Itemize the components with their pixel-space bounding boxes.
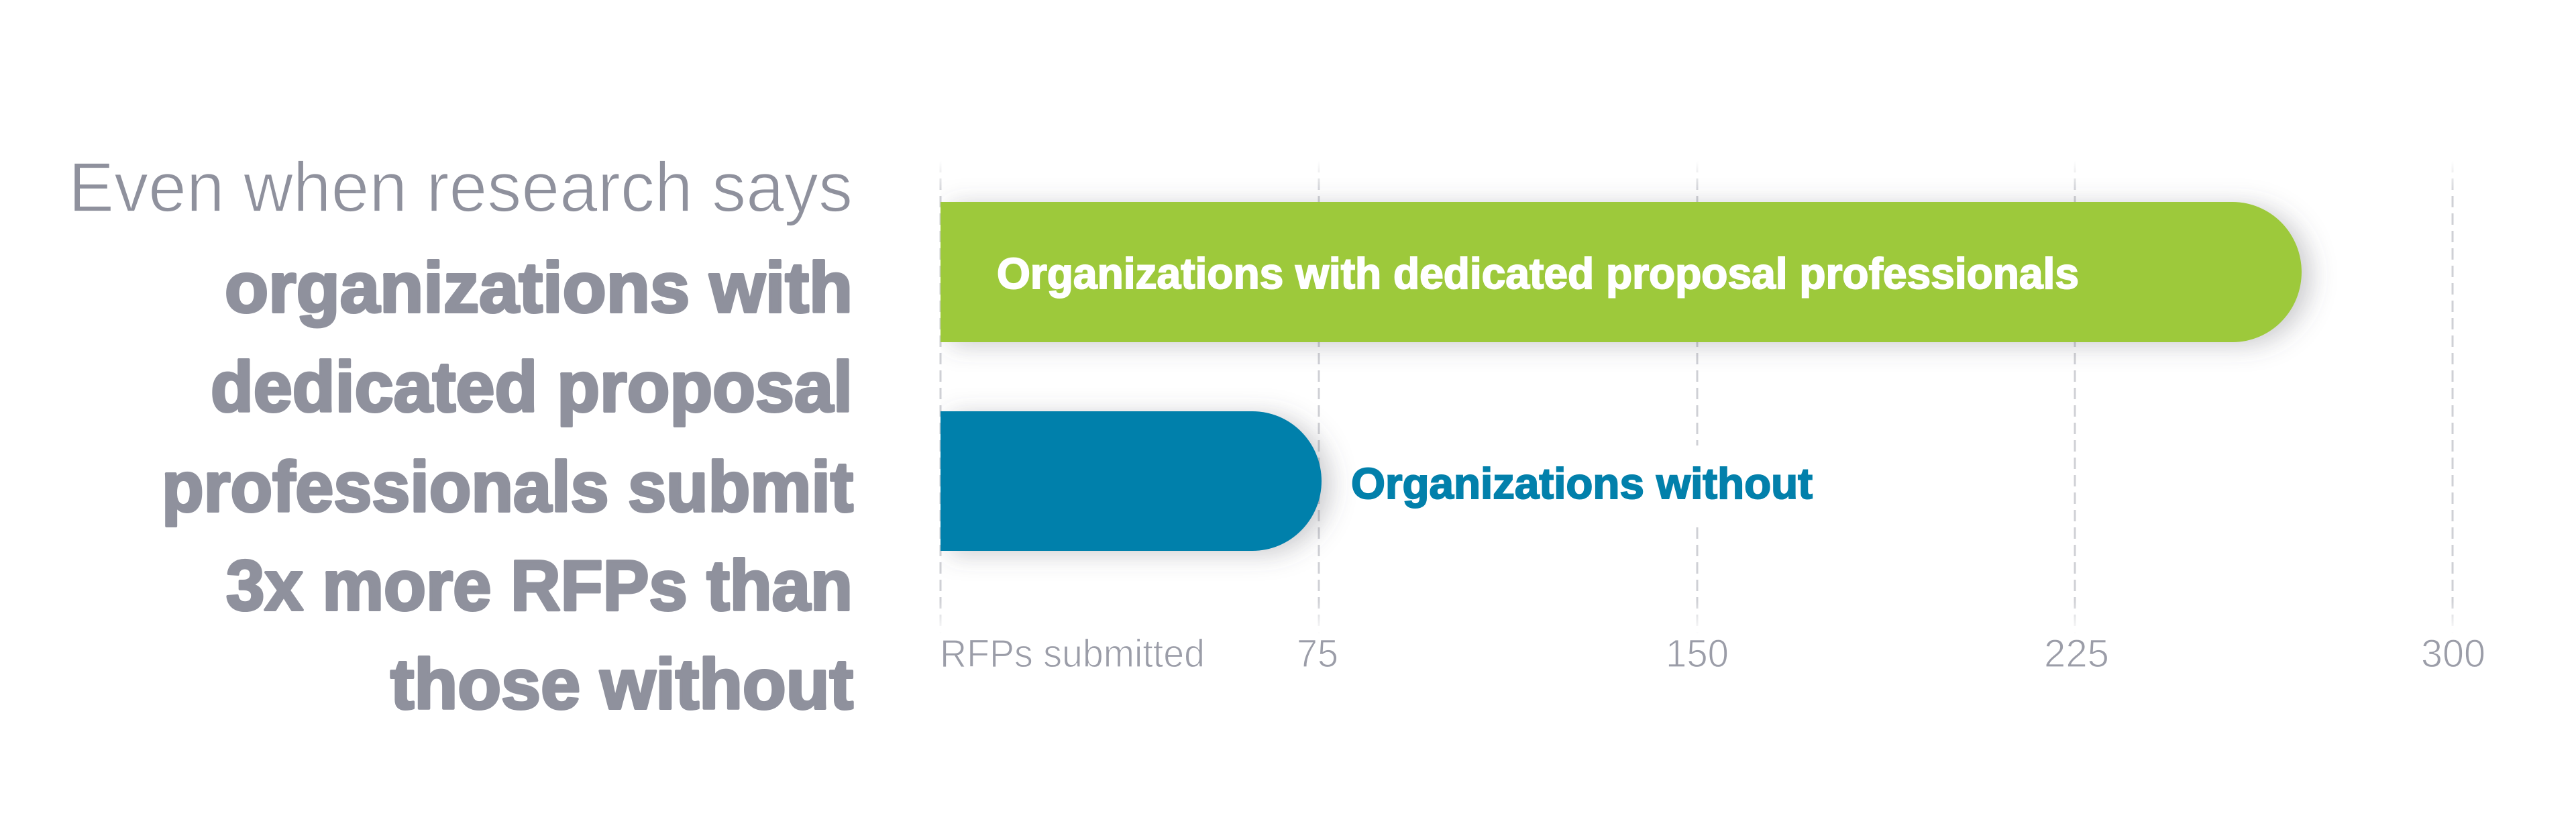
infographic canvas xyxy=(74,161,2483,711)
bar: organizations without xyxy=(941,411,1322,551)
dashed grid lines xyxy=(932,161,2462,634)
bar: organizations with dedicated proposal professionals xyxy=(941,202,2302,342)
headline bold lines: professionals submit xyxy=(162,448,853,527)
axis labels: 150 xyxy=(1666,632,1729,676)
headline text block xyxy=(68,148,853,724)
bar label: without xyxy=(1351,446,1813,524)
bar label: with dedicated professionals: Organizations with dedicated proposal professionals xyxy=(997,249,2079,298)
bar chart xyxy=(932,161,2485,676)
headline intro line: Even when research says xyxy=(68,148,853,227)
bar label: without: Organizations without xyxy=(1351,459,1813,508)
axis labels xyxy=(940,632,2485,676)
headline bold lines xyxy=(162,248,853,724)
axis labels: 75 xyxy=(1297,632,1338,676)
headline bold lines: those without xyxy=(390,645,853,724)
headline bold lines: organizations with xyxy=(225,248,853,327)
headline bold lines: 3x more RFPs than xyxy=(226,546,853,625)
axis labels: 300 xyxy=(2421,632,2485,676)
axis labels: RFPs submitted xyxy=(940,632,1205,676)
axis labels: 225 xyxy=(2044,632,2109,676)
headline bold lines: dedicated proposal xyxy=(211,348,853,427)
